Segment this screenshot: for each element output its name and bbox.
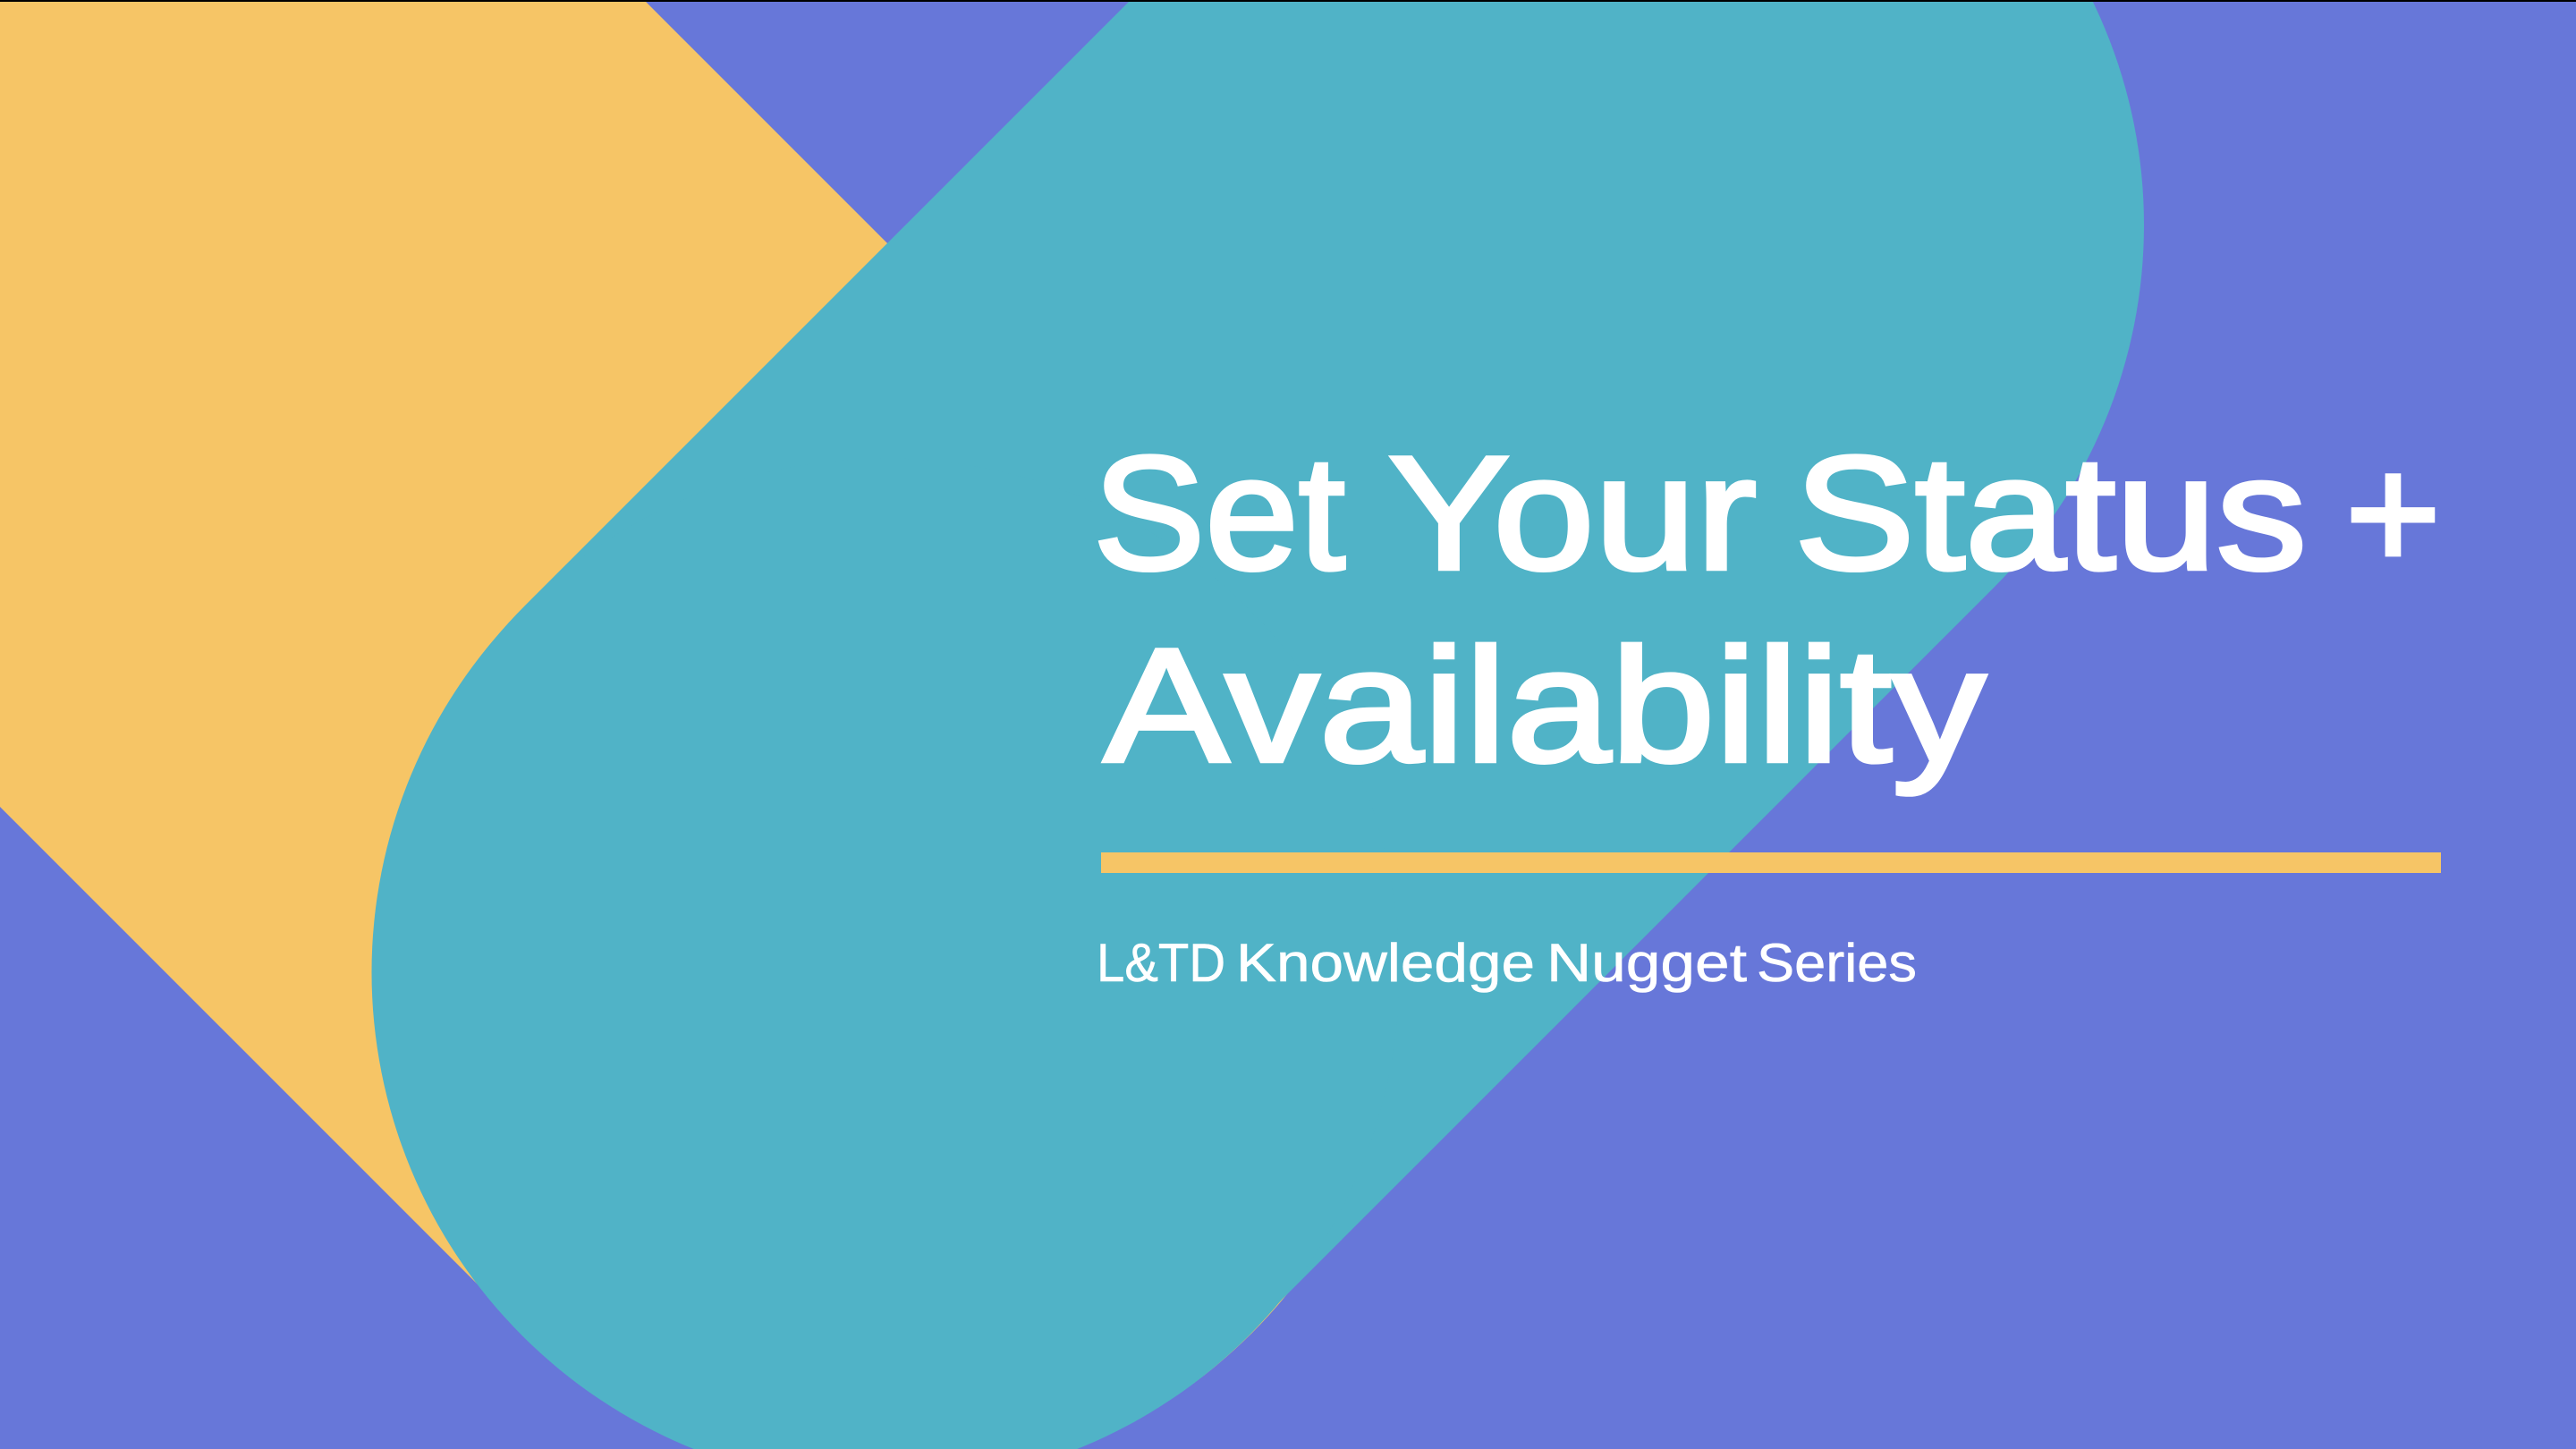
title line 1: Status xyxy=(1794,423,2307,604)
teal diagonal capsule xyxy=(372,225,1631,1449)
title line 1: Set xyxy=(1093,423,1345,604)
title line 2: Availability xyxy=(1104,615,1987,796)
subtitle: Knowledge xyxy=(1236,933,1535,993)
subtitle xyxy=(1097,933,1917,993)
subtitle: L&TD xyxy=(1097,933,1225,993)
title line 1 xyxy=(1093,423,2441,604)
title xyxy=(1093,423,2441,796)
subtitle: Nugget xyxy=(1546,933,1747,993)
title line 1: Your xyxy=(1388,423,1757,604)
subtitle: Series xyxy=(1757,933,1917,993)
yellow divider bar xyxy=(1101,852,2441,873)
yellow diagonal capsule xyxy=(0,0,889,970)
title line 1: + xyxy=(2345,423,2441,604)
top edge strip xyxy=(0,0,2576,2)
